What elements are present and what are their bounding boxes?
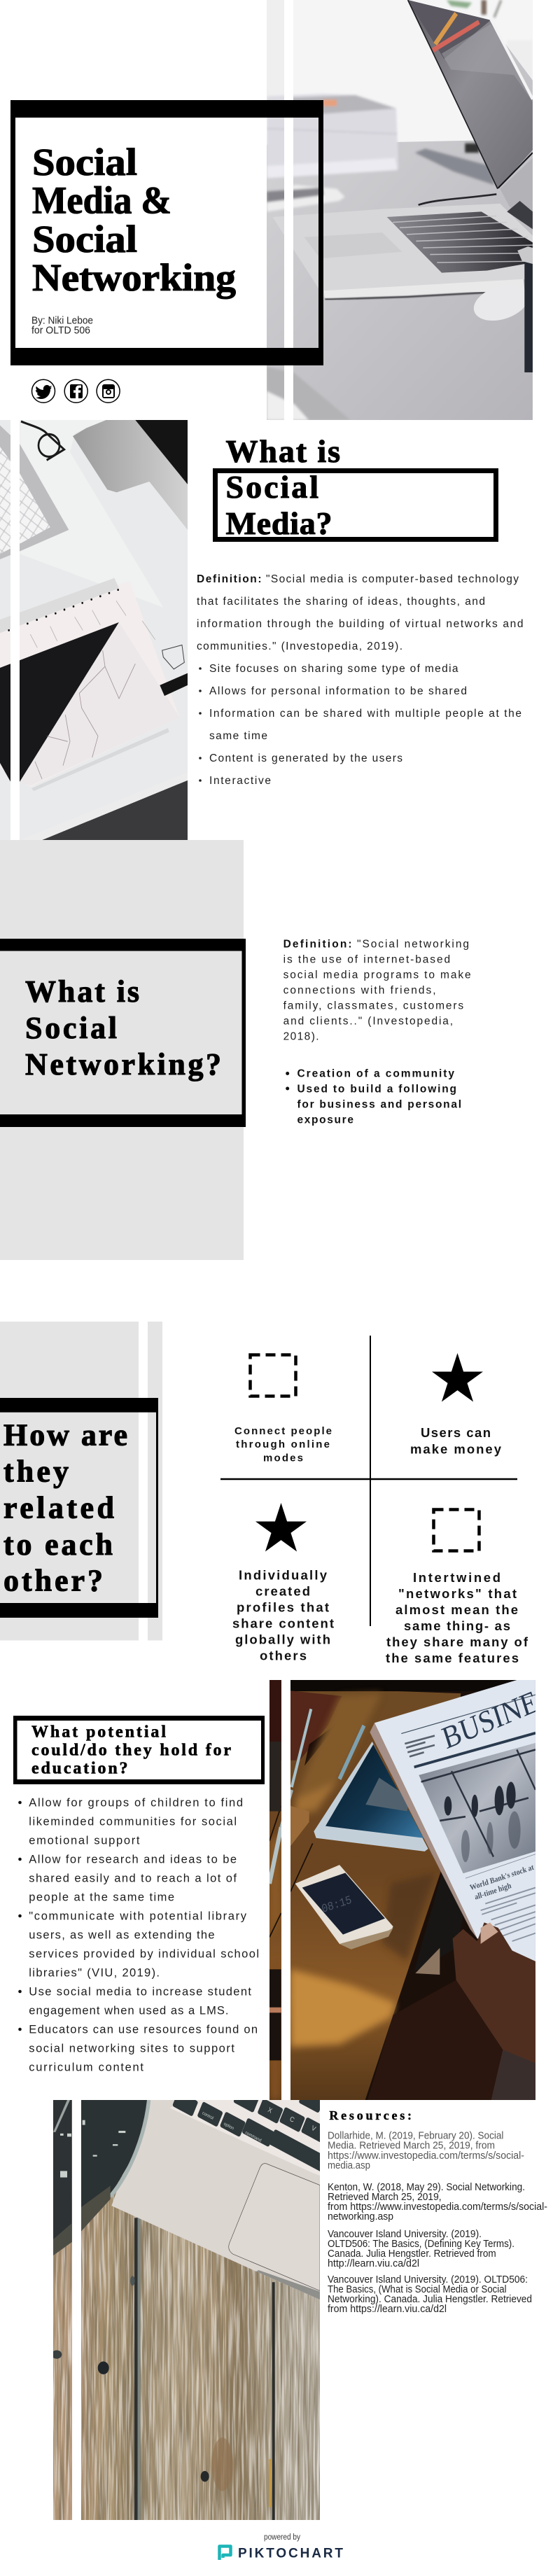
text block: social media definition [197, 573, 524, 652]
quadrant: connect people: modes [263, 1452, 303, 1464]
heading: what potential: education? [31, 1760, 127, 1778]
heading: how are they related: related [4, 1491, 114, 1525]
quadrant grid lines [220, 1336, 517, 1626]
list: education uses: Allow for research and ideas to be [29, 1854, 237, 1866]
icon: star [255, 1503, 307, 1551]
quadrant: connect people: through online [236, 1438, 330, 1450]
footer: Piktochart logo: PIKTOCHART [238, 2547, 343, 2561]
reference: Kenton: from https://www.investopedia.com/terms/s/social- [328, 2202, 547, 2213]
quadrant: intertwined networks: same thing- as [404, 1618, 510, 1633]
text block: social networking definition: Definition: [284, 938, 352, 951]
heading: how are they related: other? [4, 1564, 103, 1598]
list: education uses: likeminded communities for social [29, 1816, 237, 1828]
reference: Kenton [328, 2182, 547, 2222]
list: social media traits: Interactive [209, 775, 271, 787]
quadrant: intertwined networks: almost mean the [396, 1602, 518, 1617]
heading: what potential: could/do they hold for [31, 1742, 231, 1760]
quadrant: connect people [234, 1355, 332, 1464]
reference: Vancouver Island University definition: Vancouver Island University. (2019). OLTD506: [328, 2274, 528, 2286]
photo: laptop on weathered wood: X [267, 2106, 274, 2115]
heading: what is social media: What is [225, 433, 340, 469]
list: education uses: people at the same time [29, 1891, 174, 1904]
photo: laptop on weathered wood: option [223, 2121, 234, 2132]
reference: Vancouver Island University key terms: Vancouver Island University. (2019). [328, 2229, 482, 2240]
icon: dashed square [434, 1509, 479, 1551]
text block: social networking definition: family, classmates, customers [284, 1000, 463, 1012]
quadrant: connect people: Connect people [234, 1425, 332, 1437]
heading: how are they related: they [4, 1455, 69, 1488]
list: social networking traits: Used to build a following [297, 1084, 456, 1095]
icon: instagram [97, 379, 120, 402]
reference: Dollarhide: Media. Retrieved March 25, 2019, from [328, 2141, 495, 2152]
reference: Vancouver Island University key terms [328, 2229, 514, 2269]
photo: newspaper, phone and tablet on wood table: 08:15 [321, 1893, 354, 1916]
quadrant: individually created profiles: Individually [239, 1568, 328, 1582]
photo: newspaper, phone and tablet on wood table [270, 1680, 542, 2100]
text block: social networking definition: "Social networking [357, 938, 469, 951]
photo: laptop on weathered wood [52, 2087, 330, 2520]
reference: Kenton: networking.asp [328, 2211, 393, 2222]
text block: social networking definition: and clients.." (Investopedia, [284, 1015, 453, 1028]
reference: Dollarhide: Dollarhide, M. (2019, February 20). Social [328, 2131, 503, 2142]
decorative gap in desk photo [10, 420, 20, 840]
footer: Piktochart logo [220, 2533, 343, 2561]
heading: what is social media: Social [225, 469, 318, 505]
quadrant: individually created profiles: others [260, 1648, 307, 1663]
list: education uses [18, 1796, 259, 2073]
quadrant: individually created profiles: profiles that [237, 1600, 329, 1614]
title: Media & [32, 179, 172, 221]
list: education uses: engagement when used as a LMS. [29, 2005, 229, 2017]
quadrant: intertwined networks: "networks" that [398, 1586, 517, 1601]
photo: laptop on weathered wood: control [202, 2110, 214, 2121]
list: education uses: curriculum content [29, 2061, 144, 2073]
quadrant: individually created profiles: share content [232, 1616, 334, 1631]
list: education uses: "communicate with potential library [29, 1910, 247, 1922]
list: education uses: libraries" (VIU, 2019). [29, 1967, 160, 1980]
heading frame [216, 470, 496, 539]
list: education uses: emotional support [29, 1834, 140, 1847]
byline: for OLTD 506 [31, 325, 90, 336]
footer: Piktochart logo: powered by [264, 2533, 300, 2542]
panel: grey stripes [0, 1322, 162, 1641]
list: education uses: Allow for groups of children to find [29, 1796, 243, 1809]
text block: social media definition: "Social media is computer-based technology [266, 573, 519, 585]
photo: laptop on weathered wood: command [244, 2130, 262, 2143]
social icons [32, 379, 120, 402]
heading: resources: Resources: [329, 2108, 412, 2122]
heading: how are they related [4, 1418, 127, 1598]
heading frame [0, 939, 246, 1127]
list: social media traits [199, 663, 522, 787]
icon: twitter [32, 379, 55, 402]
icon: dashed square [251, 1355, 295, 1396]
quadrant: individually created profiles: created [255, 1583, 310, 1599]
byline [31, 315, 93, 336]
reference: Kenton: Kenton, W. (2018, May 29). Social Networking. [328, 2182, 525, 2193]
byline: By: Niki Leboe [31, 315, 93, 326]
decorative gap in hero photo [284, 0, 293, 420]
list: social networking traits: Creation of a community [297, 1068, 454, 1079]
title frame [10, 100, 323, 365]
list: education uses: Use social media to increase student [29, 1985, 251, 1998]
text block: social media definition: Definition: [197, 573, 262, 585]
reference: Vancouver Island University definition [328, 2274, 532, 2315]
reference: Vancouver Island University definition: from https://learn.viu.ca/d2l [328, 2304, 447, 2315]
icon: facebook [64, 379, 88, 402]
decorative gap in wood photo [72, 2100, 81, 2520]
photo: newspaper, phone and tablet on wood table: World Bank's stock at [469, 1863, 535, 1892]
panel: grey block [0, 840, 244, 1260]
list: education uses: shared easily and to reach a lot of [29, 1872, 237, 1884]
quadrant: make money [410, 1353, 502, 1456]
icon: Piktochart P mark [220, 2547, 231, 2560]
heading: what is social media: Media? [225, 505, 332, 541]
quadrant: individually created profiles: globally with [235, 1632, 330, 1646]
photo: desk with marble notebook [0, 420, 188, 840]
list: social media traits: Allows for personal information to be shared [209, 685, 467, 697]
list: education uses: users, as well as extending the [29, 1929, 215, 1942]
quadrant: intertwined networks: Intertwined [413, 1570, 500, 1585]
list: social media traits: same time [209, 730, 267, 742]
list: education uses: services provided by individual school [29, 1947, 259, 1960]
title [32, 141, 236, 299]
photo: laptop on weathered wood: C [289, 2115, 295, 2124]
heading: how are they related: to each [4, 1527, 113, 1562]
quadrant: make money: make money [410, 1442, 502, 1456]
reference: Vancouver Island University key terms: OLTD506: The Basics, (Defining Key Terms). [328, 2239, 514, 2250]
list: education uses: Educators can use resources found on [29, 2023, 258, 2036]
reference: Vancouver Island University key terms: Canada. Julia Hengstler. Retrieved from [328, 2248, 496, 2260]
text block: social networking definition: social media programs to make [284, 969, 471, 981]
quadrant: intertwined networks [386, 1509, 528, 1665]
reference: Dollarhide [328, 2131, 524, 2171]
photo: laptop on weathered wood: V [311, 2124, 317, 2133]
reference: Dollarhide: media.asp [328, 2160, 370, 2171]
reference: Dollarhide: https://www.investopedia.com/terms/s/social- [328, 2150, 524, 2162]
photo: newspaper, phone and tablet on wood table: BUSINE [438, 1684, 542, 1756]
quadrant: intertwined networks: the same features [386, 1651, 519, 1665]
heading frame [0, 1398, 158, 1618]
title: Social [32, 141, 137, 183]
heading: what is social networking: Social [25, 1011, 117, 1045]
list: social networking traits: for business and personal [297, 1099, 461, 1110]
list: social media traits: Site focuses on sharing some type of media [209, 663, 458, 675]
text block: social networking definition: is the use of internet-based [284, 953, 450, 966]
list: social networking traits: exposure [297, 1114, 354, 1126]
reference list [328, 2131, 547, 2315]
heading: what is social networking [25, 974, 221, 1082]
title: Social [32, 218, 137, 260]
title: Networking [32, 256, 236, 299]
text block: social networking definition: connections with friends, [284, 984, 436, 997]
quadrant: individually created profiles [232, 1503, 334, 1663]
text block: social networking definition [284, 938, 471, 1043]
heading: what potential [13, 1716, 265, 1784]
quadrant: make money: Users can [421, 1425, 491, 1440]
heading: what potential: What potential [31, 1723, 166, 1742]
heading: what is social networking: What is [25, 974, 139, 1009]
list: education uses: social networking sites to support [29, 2043, 234, 2055]
quadrant: intertwined networks: they share many of [386, 1634, 528, 1649]
decorative gap in newspaper photo [281, 1680, 290, 2100]
text block: social media definition: information through the building of virtual networks and [197, 618, 524, 630]
icon: star [432, 1353, 483, 1401]
heading: how are they related: How are [4, 1418, 127, 1452]
reference: Vancouver Island University definition: The Basics, (What is Social Media or Social [328, 2284, 507, 2295]
text block: social networking definition: 2018). [284, 1030, 319, 1043]
reference: Kenton: Retrieved March 25, 2019, [328, 2192, 442, 2203]
reference: Vancouver Island University key terms: http://learn.viu.ca/d2l [328, 2258, 419, 2269]
text block: social media definition: communities." (Investopedia, 2019). [197, 640, 402, 652]
reference: Vancouver Island University definition: Networking). Canada. Julia Hengstler. Retrieved [328, 2294, 532, 2305]
photo: laptop on desk [267, 0, 533, 420]
list: social networking traits [286, 1068, 461, 1126]
text block: social media definition: that facilitates the sharing of ideas, thoughts, and [197, 596, 485, 608]
heading: what is social media [216, 433, 496, 541]
list: social media traits: Content is generated by the users [209, 752, 402, 764]
photo: newspaper, phone and tablet on wood table: all-time high [474, 1881, 512, 1902]
list: social media traits: Information can be shared with multiple people at the [209, 708, 522, 720]
heading: what is social networking: Networking? [25, 1047, 221, 1082]
